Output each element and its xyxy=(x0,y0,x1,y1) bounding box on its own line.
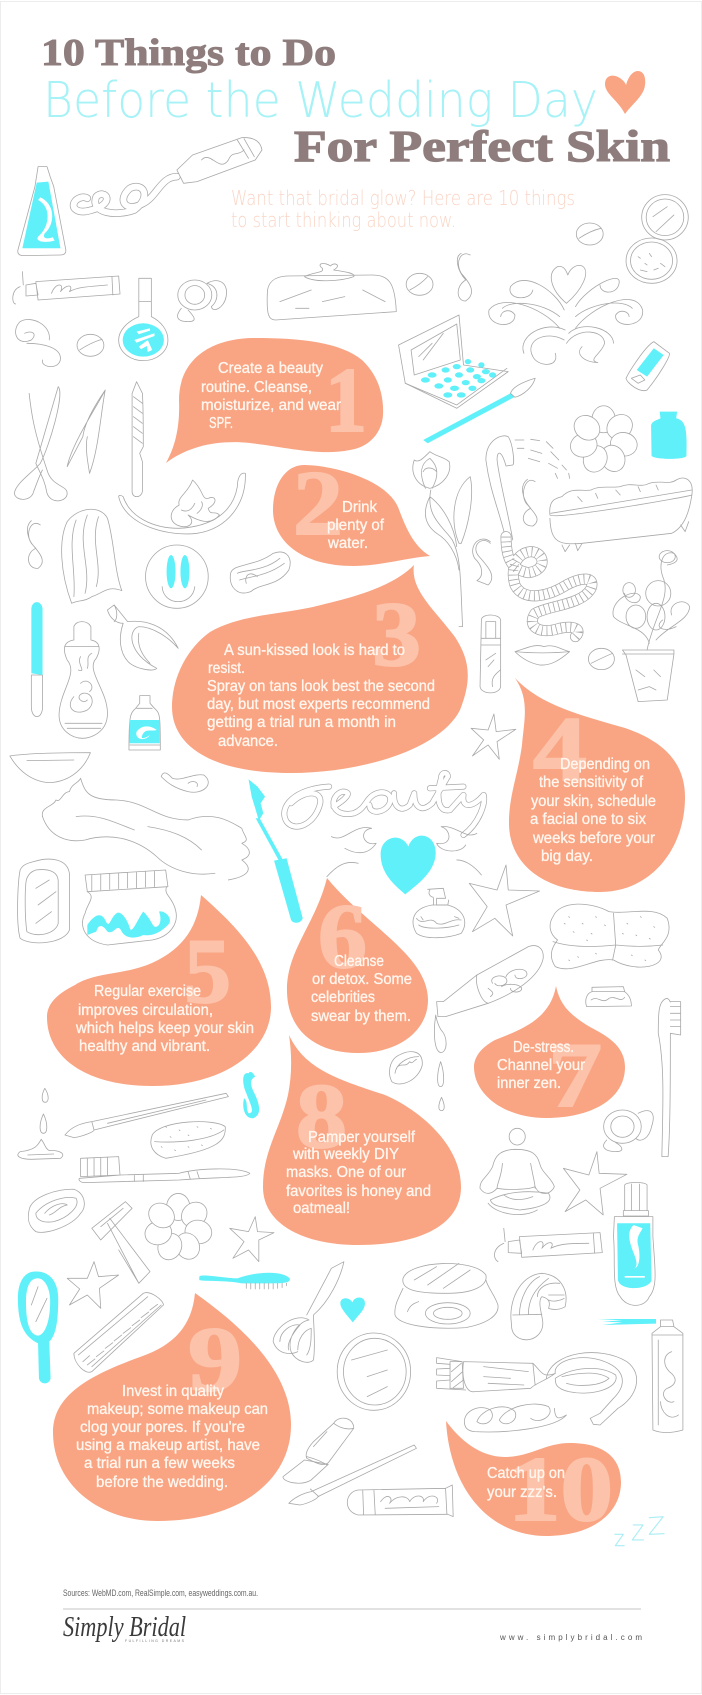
icon: bowl xyxy=(10,753,90,783)
tip 2 text: plenty of xyxy=(327,517,385,534)
icon: spray can xyxy=(598,1319,683,1432)
icon: s curl xyxy=(457,253,472,301)
title: Before the Wedding Day xyxy=(43,72,598,129)
icon: flower xyxy=(568,406,639,476)
icon: toothbrush xyxy=(658,998,681,1157)
tip 1 text: routine. Cleanse, xyxy=(201,379,312,396)
tip 10 text: your zzz's. xyxy=(487,1484,557,1501)
line-art icons: second section xyxy=(10,382,692,923)
tip 9 text: a trial run a few weeks xyxy=(84,1455,235,1472)
tip 10 text: Catch up on xyxy=(487,1465,565,1482)
icon: cosmetic case xyxy=(395,1263,498,1328)
title: 10 Things to Do xyxy=(41,32,336,74)
line-art icons: fourth section xyxy=(18,1262,683,1546)
icon: potted plant xyxy=(613,551,690,702)
icon: cyan hand mirror xyxy=(18,1272,58,1383)
icon: hair xyxy=(62,509,122,603)
icon: ribbed hose xyxy=(506,537,592,637)
icon: smiley face xyxy=(146,545,208,608)
number 7: 7 xyxy=(548,1024,602,1126)
drop shape 3 xyxy=(172,565,468,773)
icon: tube xyxy=(347,1485,453,1517)
icon: compacts xyxy=(576,195,688,283)
drop shape 2 xyxy=(273,465,430,566)
icon: cyan small bottle xyxy=(129,696,160,750)
icon: small oval xyxy=(588,648,614,670)
panel: tip 8 xyxy=(263,1035,461,1245)
website url: www. simplybridal.com xyxy=(499,1633,642,1642)
icon: small tube xyxy=(13,272,120,304)
sources: Sources: WebMD.com, RealSimple.com, easyweddings.com.au. xyxy=(63,1588,258,1598)
icon: orange heart xyxy=(605,71,645,114)
tip 6 text: celebrities xyxy=(311,989,375,1006)
icon: squiggle xyxy=(161,773,208,792)
panel: tip 1 xyxy=(166,338,383,463)
icon: mirror xyxy=(18,859,69,943)
icon: lips xyxy=(515,646,570,665)
tip 4 text: Depending on xyxy=(560,756,650,773)
title xyxy=(41,32,670,171)
icon: dropper bottle xyxy=(59,622,107,738)
icon: cyan tube xyxy=(18,167,66,256)
icon: squeezed toothpaste xyxy=(74,138,262,213)
panel: tip 7 xyxy=(474,986,625,1126)
tip 4 text xyxy=(530,756,656,865)
icon: compact ring xyxy=(178,280,226,322)
icon: s curl xyxy=(27,521,42,568)
tip 9 text: using a makeup artist, have xyxy=(76,1437,260,1454)
tip 7 text: De-stress. xyxy=(513,1039,574,1056)
icon: cyan s curl xyxy=(243,1072,259,1118)
tip 8 text: Pamper yourself xyxy=(308,1129,416,1146)
logo: Simply Bridal: FULFILLING DREAMS xyxy=(125,1639,185,1643)
icon: soap xyxy=(389,1052,422,1084)
icon: cyan perfume xyxy=(651,412,687,459)
intro text: to start thinking about now. xyxy=(231,208,456,232)
tip 6 text xyxy=(311,953,412,1025)
tip 8 text xyxy=(286,1129,431,1217)
icon: star xyxy=(67,1262,119,1308)
tip 8 text: oatmeal! xyxy=(293,1200,350,1217)
number 10: 10 xyxy=(508,1438,613,1540)
panel: tip 2 xyxy=(273,452,430,566)
icon: flower xyxy=(142,1193,214,1264)
tip 3 text: Spray on tans look best the second xyxy=(207,678,435,695)
tip 4 text: a facial one to six xyxy=(530,811,646,828)
icon: serum bottle xyxy=(480,615,501,693)
tip 2 text xyxy=(327,499,385,552)
intro text: Want that bridal glow? Here are 10 things xyxy=(231,186,575,210)
panel: tip 9 xyxy=(53,1293,291,1521)
number 5: 5 xyxy=(184,920,231,1022)
icon: star xyxy=(563,1152,627,1215)
panel: tip 10 xyxy=(446,1421,621,1540)
icon: ornamental swirl xyxy=(489,265,643,364)
drop shape 7 xyxy=(474,986,625,1118)
intro text xyxy=(231,186,575,232)
title: For Perfect Skin xyxy=(294,122,670,171)
icon: s curl xyxy=(523,479,537,526)
icon: rose xyxy=(413,452,472,627)
icon: cyan heart xyxy=(340,1297,365,1322)
icon: sponge xyxy=(550,904,669,969)
tip 5 text xyxy=(75,983,254,1055)
icon: tilted bottle xyxy=(437,946,543,1017)
icon: swirl xyxy=(464,1404,566,1432)
number 8: 8 xyxy=(296,1065,347,1167)
logo: Simply Bridal: Simply Bridal xyxy=(63,1612,186,1643)
icon: fire ornament xyxy=(119,473,245,534)
icon: s curl xyxy=(473,539,492,585)
icon: s curl left xyxy=(16,320,60,367)
tip 3 text: A sun-kissed look is hard to xyxy=(224,642,405,659)
icon: small tube xyxy=(494,1228,602,1262)
icon: cream jar xyxy=(83,870,176,945)
tip 6 text: Cleanse xyxy=(334,953,384,970)
tip 2 text: Drink xyxy=(342,499,378,516)
drop shape 5 xyxy=(47,895,271,1086)
icon: scissors xyxy=(273,1262,344,1362)
icon: toothbrush horizontal xyxy=(79,1157,250,1183)
icon: shower head xyxy=(486,436,570,540)
icon: scissors xyxy=(14,387,67,501)
drop shape 6 xyxy=(287,878,428,1053)
tip 6 text: or detox. Some xyxy=(312,971,412,988)
tip 7 text: inner zen. xyxy=(497,1075,561,1092)
icon: sanitary pad xyxy=(230,552,290,593)
tip 5 text: Regular exercise xyxy=(94,983,201,1000)
tip 5 text: improves circulation, xyxy=(78,1002,213,1019)
tip 7 text: Channel your xyxy=(497,1057,586,1074)
icon: pump bottle xyxy=(413,888,465,938)
icon: zzz xyxy=(615,1517,664,1546)
icon: cyan shampoo bottle xyxy=(613,1182,655,1305)
tip 7 text xyxy=(497,1039,586,1092)
icon: long brush xyxy=(289,1445,416,1505)
icon: nail file xyxy=(132,382,143,497)
icon: candle and drops xyxy=(18,1088,63,1159)
tip 1 text xyxy=(201,360,342,432)
tip 4 text: your skin, schedule xyxy=(531,793,656,810)
icon: makeup palette xyxy=(399,315,508,408)
tip 9 text: before the wedding. xyxy=(96,1474,228,1491)
icon: round soap xyxy=(28,1189,84,1232)
tip 8 text: favorites is honey and xyxy=(286,1183,431,1200)
panel: tip 5 xyxy=(47,895,271,1086)
tip 3 text: day, but most experts recommend xyxy=(207,696,430,713)
tip 9 text: makeup; some makeup can xyxy=(87,1401,268,1418)
icon: hair wave xyxy=(42,778,249,880)
icon: star xyxy=(471,714,516,759)
number 1: 1 xyxy=(325,349,367,451)
tip 9 text: Invest in quality xyxy=(122,1383,224,1400)
tip 3 text: advance. xyxy=(218,733,278,750)
icon: round sponge xyxy=(151,1122,225,1158)
tip 3 text xyxy=(207,642,435,750)
icon: hair clipper xyxy=(437,1353,637,1425)
icon: bathtub xyxy=(550,478,692,552)
tip 2 text: water. xyxy=(327,535,368,552)
tip 3 text: getting a trial run a month in xyxy=(207,714,396,731)
line-art icons: upper section xyxy=(13,138,688,476)
icon: razor xyxy=(92,1202,150,1283)
icon: small oval xyxy=(77,334,104,356)
icon: star xyxy=(230,1217,274,1262)
icon: cyan mascara xyxy=(249,779,303,923)
icon: small soap xyxy=(406,273,433,295)
panel: tip 3 xyxy=(172,565,468,773)
drop shape 9 xyxy=(53,1293,291,1521)
tip 10 text xyxy=(487,1465,565,1501)
tip 8 text: with weekly DIY xyxy=(292,1146,399,1163)
drop shape 1 xyxy=(166,338,383,463)
tip 5 text: healthy and vibrant. xyxy=(79,1038,210,1055)
tip 1 text: moisturize, and wear xyxy=(201,397,342,414)
drop shape 10 xyxy=(446,1421,621,1536)
tip 9 text xyxy=(76,1383,268,1491)
number 9: 9 xyxy=(188,1308,242,1410)
icon: eyelash curler xyxy=(107,605,178,670)
icon: phone compact xyxy=(626,342,670,391)
tip 8 text: masks. One of our xyxy=(286,1164,407,1181)
icon: cyan heart xyxy=(381,836,436,894)
tip 5 text: which helps keep your skin xyxy=(75,1020,254,1037)
icon: small jar xyxy=(586,987,631,1007)
icon: clutch purse xyxy=(267,263,396,320)
icon: paint brush xyxy=(65,1093,228,1138)
tip 1 text: Create a beauty xyxy=(218,360,323,377)
panel: tip 4 xyxy=(509,678,685,892)
icon: hair curl xyxy=(511,1273,566,1340)
icon: hair brush xyxy=(74,1293,163,1372)
number 2: 2 xyxy=(293,452,343,554)
tip 3 text: resist. xyxy=(208,660,245,677)
icon: cyan round bottle xyxy=(119,278,168,361)
icon: tweezers xyxy=(67,390,105,473)
icon: cyan comb xyxy=(199,1273,290,1289)
icon: meditating figure xyxy=(480,1128,554,1215)
icon: cyan nail file xyxy=(31,602,43,717)
drop shape 4 xyxy=(509,678,685,892)
tip 4 text: big day. xyxy=(541,848,593,865)
line-art icons: third section xyxy=(18,859,681,1305)
icon: oval mirror xyxy=(337,1333,411,1410)
tip 4 text: weeks before your xyxy=(532,830,656,847)
panel: tip 6 xyxy=(287,878,428,1053)
drop shape 8 xyxy=(263,1035,461,1245)
tip 9 text: clog your pores. If you're xyxy=(80,1419,245,1436)
number 6: 6 xyxy=(318,885,367,987)
tip 1 text: SPF. xyxy=(209,415,233,432)
icon: compact ring xyxy=(604,1110,653,1152)
number 3: 3 xyxy=(372,583,421,685)
icon: cyan brush xyxy=(423,378,535,443)
icon: star xyxy=(469,865,540,936)
tip 4 text: the sensitivity of xyxy=(539,774,644,791)
icon: beauty lettering xyxy=(284,773,484,877)
icon: lipstick xyxy=(283,1418,354,1483)
tip 6 text: swear by them. xyxy=(311,1008,411,1025)
icon: drops xyxy=(434,1015,446,1111)
number 4: 4 xyxy=(533,698,587,800)
